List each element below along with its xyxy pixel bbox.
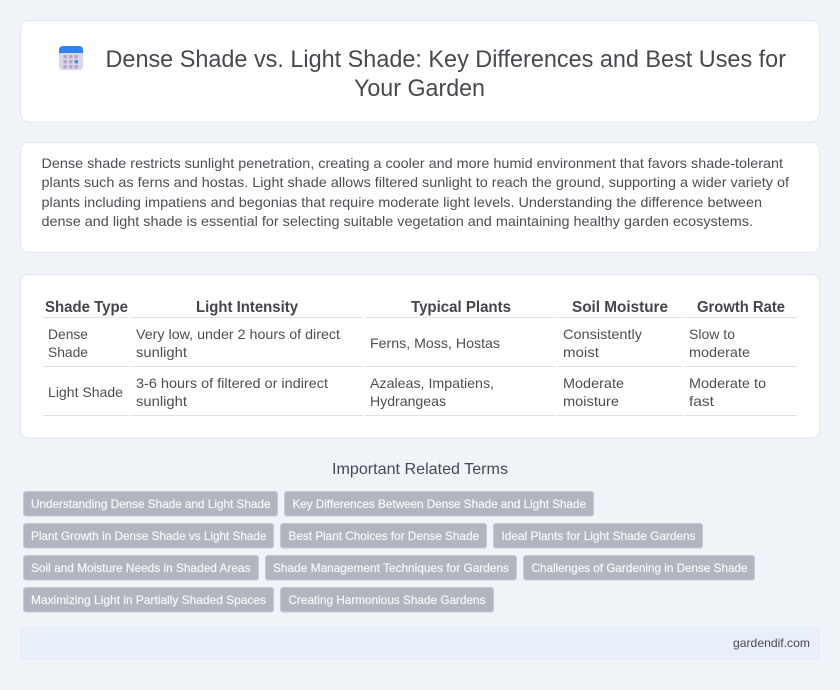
- table header row: Light Intensity: [196, 299, 298, 316]
- table row: dense shade: Very low, under 2 hours of direct: [136, 326, 340, 342]
- table row: light shade: sunlight: [136, 393, 187, 409]
- table row: light shade: 3-6 hours of filtered or indirect: [136, 375, 328, 391]
- table row: dense shade: moist: [563, 344, 599, 360]
- table row: dense shade: Shade: [48, 344, 88, 360]
- table row: dense shade: Consistently: [563, 326, 642, 342]
- tags: related terms: Understanding Dense Shade and Light Shade: [31, 497, 271, 511]
- table row: light shade: Hydrangeas: [370, 393, 446, 409]
- tags: related terms: Best Plant Choices for Dense Shade: [288, 529, 479, 543]
- table header row: Soil Moisture: [572, 299, 668, 316]
- table header row: Typical Plants: [411, 299, 511, 316]
- table header row: Growth Rate: [697, 299, 785, 316]
- tags: related terms: Soil and Moisture Needs in Shaded Areas: [31, 561, 250, 575]
- tags: related terms: Creating Harmonious Shade Gardens: [288, 593, 486, 607]
- footer source text: gardendif.com: [733, 636, 810, 650]
- text block: intro: dense and light shade is essential for selecting suitable vegetation and maintaining healthy garden ecosystems.: [42, 213, 753, 229]
- text block: intro: plants including impatiens and begonias that require moderate light levels. Understanding the difference between: [42, 194, 762, 210]
- tags: related terms: [24, 492, 754, 612]
- title: Dense Shade vs. Light Shade: Key Differences and Best Uses for: [106, 46, 786, 73]
- panel: title header: [20, 20, 820, 122]
- tags: related terms: Challenges of Gardening in Dense Shade: [532, 561, 748, 575]
- table row: dense shade: sunlight: [136, 344, 187, 360]
- heading: important related terms: Important Related Terms: [332, 461, 508, 478]
- panel: comparison table: [20, 274, 820, 438]
- text block: intro: Dense shade restricts sunlight penetration, creating a cooler and more humid environment that favors shade-tolerant: [42, 155, 783, 171]
- tags: related terms: Plant Growth in Dense Shade vs Light Shade: [31, 529, 267, 543]
- table row: light shade: fast: [689, 393, 714, 409]
- tags: related terms: Maximizing Light in Partially Shaded Spaces: [31, 593, 266, 607]
- table row: light shade: Light Shade: [48, 384, 123, 400]
- table row: dense shade: Slow to: [689, 326, 735, 342]
- table row: light shade: moisture: [563, 393, 619, 409]
- tags: related terms: Ideal Plants for Light Shade Gardens: [502, 529, 696, 543]
- footer bar: [20, 626, 820, 660]
- table row: dense shade: Dense: [48, 326, 88, 342]
- table row: light shade: Moderate: [563, 375, 624, 391]
- text block: intro: [42, 155, 789, 229]
- tags: related terms: Shade Management Techniques for Gardens: [273, 561, 509, 575]
- table row: dense shade: Ferns, Moss, Hostas: [370, 335, 500, 351]
- table header row: [45, 299, 785, 316]
- icon: calendar: [59, 46, 83, 70]
- title: Your Garden: [354, 75, 485, 102]
- table row: light shade: Moderate to: [689, 375, 766, 391]
- table row: dense shade: [48, 326, 750, 360]
- tags: related terms: Key Differences Between Dense Shade and Light Shade: [292, 497, 586, 511]
- title: [106, 46, 786, 102]
- table header row: Shade Type: [45, 299, 128, 316]
- table row: light shade: [48, 375, 766, 409]
- table row: dense shade: moderate: [689, 344, 750, 360]
- text block: intro: plants such as ferns and hostas. Light shade allows filtered sunlight to reach the ground, supporting a wider variety of: [42, 174, 789, 190]
- table row: light shade: Azaleas, Impatiens,: [370, 375, 494, 391]
- panel: intro paragraph: [20, 142, 820, 252]
